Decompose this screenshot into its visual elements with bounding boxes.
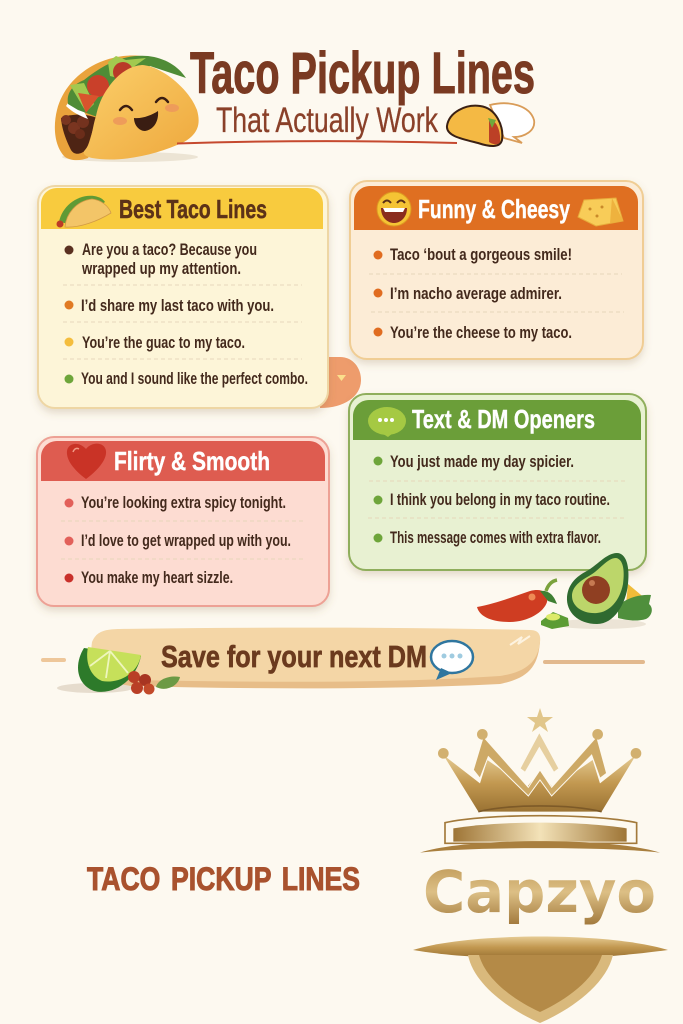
list items: You’re the cheese to my taco. — [390, 323, 572, 342]
list items: Are you a taco? Because you — [82, 240, 257, 259]
logo: capzyo crown — [413, 708, 668, 1023]
heading: Best Taco Lines — [119, 194, 267, 224]
banner shape — [91, 628, 540, 682]
icon: smiling taco — [55, 55, 199, 162]
heading: Flirty & Smooth — [114, 446, 270, 476]
icon: small taco with speech bubble — [447, 103, 534, 146]
star — [527, 708, 553, 732]
list items: I think you belong in my taco routine. — [390, 490, 610, 509]
list items: You and I sound like the perfect combo. — [81, 369, 308, 388]
panel: funny and cheesy — [350, 181, 643, 359]
list items: You make my heart sizzle. — [81, 568, 233, 587]
card header — [353, 400, 641, 440]
icon: heart — [67, 444, 106, 479]
list items: Taco ‘bout a gorgeous smile! — [390, 245, 572, 264]
card body — [38, 186, 328, 408]
icon: lime and salsa — [57, 647, 180, 694]
title underline — [177, 141, 457, 144]
shield — [468, 955, 613, 1023]
list items — [63, 240, 308, 388]
card header — [354, 186, 638, 230]
list items: You just made my day spicier. — [390, 452, 574, 471]
card body — [37, 437, 329, 606]
crown band — [420, 806, 660, 853]
decorative nick — [510, 636, 530, 645]
list items — [369, 245, 624, 342]
icon: laughing emoji — [377, 192, 411, 226]
list items: I’d love to get wrapped up with you. — [81, 531, 291, 550]
shield brim — [413, 936, 668, 958]
icon: chili, avocado and garnish — [477, 553, 652, 629]
panel: best taco lines — [38, 186, 361, 408]
wordmark: Capzyo — [423, 858, 656, 926]
panel: flirty and smooth — [37, 437, 329, 606]
list items — [368, 452, 625, 547]
panel: text and dm openers — [349, 394, 646, 570]
list items: I’d share my last taco with you. — [81, 296, 274, 315]
icon: green chat bubble — [368, 407, 406, 437]
icon: blue chat bubble — [431, 641, 473, 680]
list items — [61, 493, 305, 587]
back shell — [55, 55, 155, 160]
list items: You’re looking extra spicy tonight. — [81, 493, 286, 512]
banner right rule — [543, 660, 645, 664]
card body — [350, 181, 643, 359]
subtitle: That Actually Work — [216, 101, 438, 140]
banner shadow — [92, 642, 540, 688]
meat — [61, 115, 97, 154]
banner: save for your next dm — [41, 628, 645, 694]
list items: wrapped up my attention. — [81, 259, 241, 278]
sour cream — [66, 100, 88, 119]
front shell — [84, 65, 199, 160]
heading: Funny & Cheesy — [418, 194, 570, 224]
footer label: TACO PICKUP LINES — [87, 861, 360, 897]
heading: Text & DM Openers — [412, 404, 595, 434]
crown — [438, 729, 641, 812]
list items: You’re the guac to my taco. — [82, 333, 245, 352]
card body — [349, 394, 646, 570]
card header — [41, 441, 325, 481]
tab behind card — [320, 357, 361, 408]
icon: taco — [56, 196, 111, 228]
icon: cheese — [578, 198, 623, 226]
list items: I’m nacho average admirer. — [390, 284, 562, 303]
greens — [68, 56, 186, 118]
banner left rule — [41, 658, 66, 662]
banner text: Save for your next DM — [161, 639, 427, 674]
icon: small chevron — [337, 375, 346, 381]
card header — [41, 188, 323, 229]
title: Taco Pickup Lines — [190, 41, 535, 106]
